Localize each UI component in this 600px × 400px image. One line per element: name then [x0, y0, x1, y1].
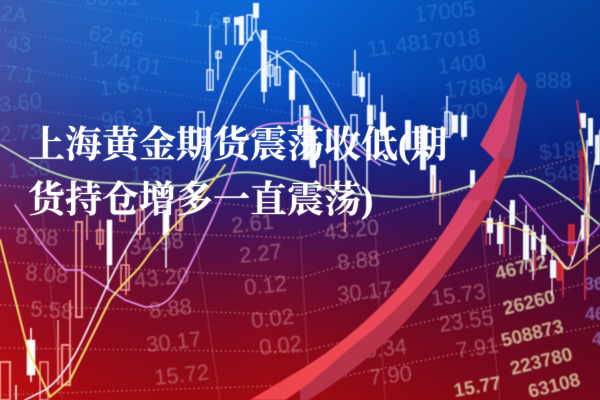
faint numbers: blue area: 62.66 [87, 20, 145, 53]
faint numbers: red area: 34.98 [127, 228, 185, 260]
pale yellow numbers: 46712 [493, 252, 549, 285]
faint numbers: red area: 5.58 [30, 296, 74, 324]
candlesticks [198, 3, 463, 210]
purple numbers far right [584, 274, 600, 349]
pale yellow numbers: 508873 [499, 316, 566, 352]
faint numbers: blue area: $188 [538, 135, 589, 165]
title: 货持仓增多一直震荡) [28, 180, 373, 221]
faint numbers: red area: 2.27 [238, 239, 283, 268]
faint numbers: red area: 0.02 [250, 304, 295, 333]
faint numbers: blue area: 1400 [436, 49, 487, 79]
faint numbers: blue area: 17864 [443, 72, 506, 103]
faint numbers: blue area: 1.30 [7, 155, 51, 183]
faint numbers: blue area: 17018 [418, 24, 481, 55]
arrow band lower shaded face [300, 157, 513, 400]
faint numbers: blue area: 1.44.01 [87, 45, 163, 80]
pale yellow numbers: 223780 [508, 344, 575, 380]
faint numbers: red area: 43.20 [323, 214, 380, 245]
arrow band upper bright face [250, 180, 482, 400]
faint numbers: blue area: 5488 [543, 158, 594, 188]
faint numbers: red area: 7.91 [454, 332, 500, 363]
faint numbers: blue area: 7.1 [3, 60, 37, 88]
faint numbers: red area: 30.17 [336, 276, 393, 307]
faint numbers: red area: 7.90 [368, 361, 413, 390]
faint numbers: red area: 5.34 [363, 334, 408, 363]
right candlesticks [487, 113, 600, 295]
red candlesticks [0, 160, 440, 400]
faint numbers: red area: 43.20 [133, 262, 190, 293]
faint numbers: blue area: 1.64 [189, 5, 235, 34]
faint numbers: blue area: 1700 [438, 97, 489, 127]
faint numbers: red area: 23.55 [437, 305, 495, 337]
faint numbers: blue area: 96.31 [100, 102, 157, 133]
faint numbers: red area: 15.73 [429, 279, 487, 311]
faint numbers: red area: 0.12 [243, 271, 288, 300]
title: 上海黄金期货震荡收低(期 [28, 125, 447, 166]
arrow head right face [497, 72, 527, 160]
arrow neck [463, 158, 500, 200]
arrow: red rising curve [250, 72, 527, 400]
faint numbers: red area: 8.88 [336, 246, 381, 275]
faint numbers: red area: 0.02 [258, 331, 303, 360]
faint numbers: red area: 2.61 [230, 209, 275, 238]
pale yellow numbers [452, 252, 582, 400]
faint numbers: red area: 8.08 [25, 260, 69, 288]
faint numbers: red area: 8.88 [148, 294, 193, 323]
pale yellow numbers: 26260 [501, 287, 557, 320]
faint numbers: blue area: 1.38 [130, 162, 173, 187]
faint numbers: blue area: 888 [535, 68, 572, 93]
faint numbers: red area: 8.08 [15, 223, 59, 251]
arrow head left face [480, 72, 520, 160]
faint numbers: blue area: 2A [0, 0, 29, 28]
faint numbers: blue area [0, 0, 594, 188]
faint numbers: red area: 15.72 [153, 359, 210, 390]
title [28, 124, 447, 221]
faint numbers: red area: 30.17 [145, 326, 202, 357]
faint numbers: blue area: 1.67 [97, 70, 143, 101]
faint numbers: blue area: 43 [5, 30, 32, 58]
faint numbers: red area [15, 209, 500, 390]
faint numbers: blue area: 11.48 [365, 30, 422, 62]
